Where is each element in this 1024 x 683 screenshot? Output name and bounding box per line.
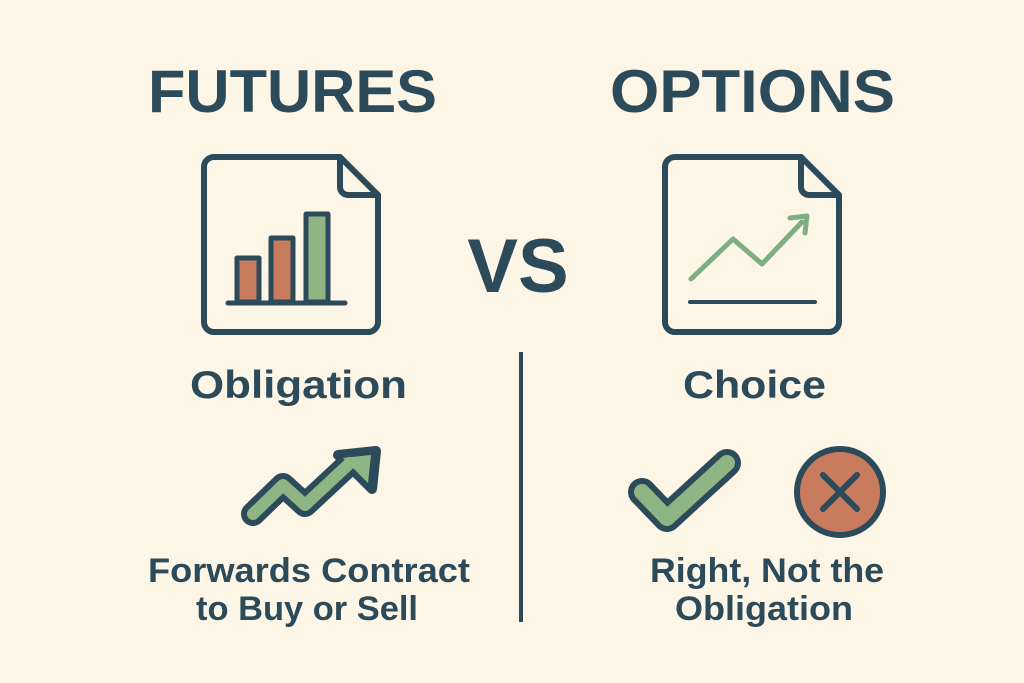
icon: x circle (797, 449, 883, 535)
title: futures: FUTURES (148, 58, 437, 125)
icon: check mark (642, 463, 727, 518)
icon: zigzag up arrow (253, 451, 376, 514)
text: futures description (148, 552, 470, 628)
text: futures description: to Buy or Sell (196, 590, 418, 628)
label: obligation: Obligation (190, 364, 407, 407)
text: options description: Right, Not the (650, 552, 884, 590)
vs label: VS (467, 224, 569, 309)
icon: futures document with bar chart (204, 157, 378, 332)
divider line (519, 352, 523, 622)
label: choice: Choice (683, 364, 826, 407)
icon: options document with line chart (665, 157, 839, 332)
text: futures description: Forwards Contract (148, 552, 470, 590)
text: options description (650, 552, 884, 628)
title: options: OPTIONS (610, 58, 895, 125)
text: options description: Obligation (675, 590, 853, 628)
